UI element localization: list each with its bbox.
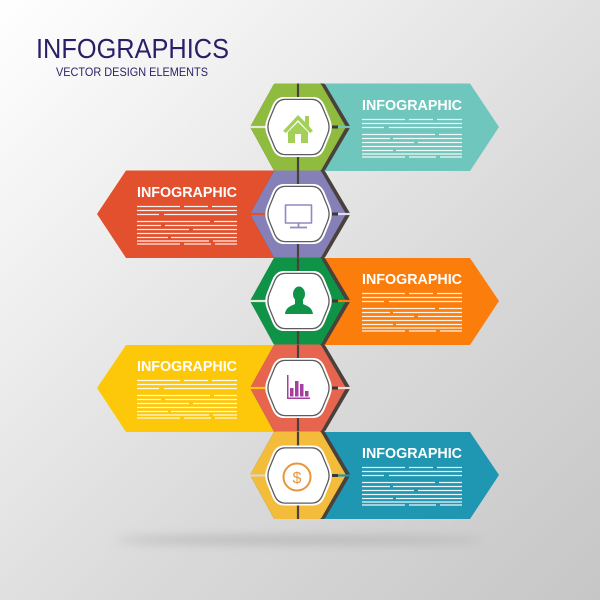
- hexagon 5 amber with dollar: [250, 432, 350, 519]
- icon: bar chart: [287, 375, 310, 399]
- text lines: [137, 206, 237, 244]
- panel: arrow 5 blue: [320, 432, 499, 519]
- text lines: [362, 294, 462, 331]
- hexagon 3 dark green with person: [250, 258, 350, 345]
- heading: INFOGRAPHIC: [362, 272, 463, 288]
- title: INFOGRAPHICS: [36, 33, 229, 64]
- panel: arrow 2 red: [97, 170, 278, 258]
- panel: arrow 4 yellow: [97, 345, 278, 432]
- hexagon 1 green with house: [250, 84, 350, 171]
- icon: dollar: $: [293, 470, 302, 487]
- text lines: [362, 120, 462, 157]
- heading: INFOGRAPHIC: [362, 98, 463, 114]
- subtitle: VECTOR DESIGN ELEMENTS: [56, 65, 208, 79]
- panel: arrow 1 teal: [320, 84, 499, 171]
- heading: INFOGRAPHIC: [137, 185, 238, 201]
- icon: monitor: [286, 205, 312, 228]
- heading: INFOGRAPHIC: [362, 446, 463, 462]
- panel: arrow 3 orange: [320, 258, 499, 345]
- ground shadow: [115, 536, 485, 544]
- heading: INFOGRAPHIC: [137, 359, 238, 375]
- text lines: [362, 468, 462, 505]
- hexagon 2 purple with monitor: [250, 170, 350, 258]
- icon: person: [285, 286, 313, 314]
- text lines: [137, 380, 237, 418]
- icon: house: [283, 115, 313, 143]
- hexagon 4 coral with chart: [250, 345, 350, 432]
